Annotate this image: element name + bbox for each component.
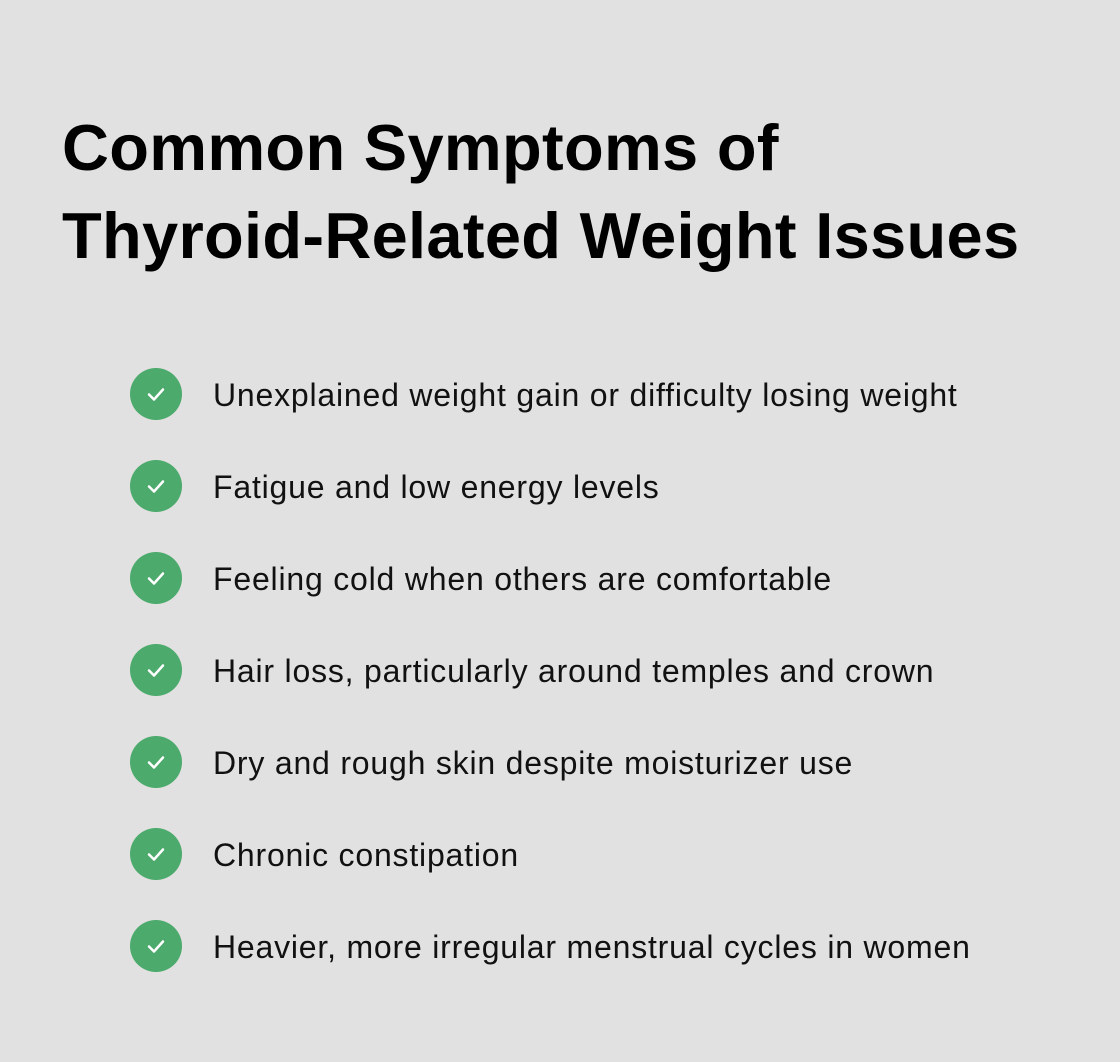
item 3: Feeling cold when others are comfortable <box>213 561 832 597</box>
item 2: Fatigue and low energy levels <box>213 469 660 505</box>
symptom list <box>130 368 971 972</box>
item 4: Hair loss, particularly around temples and crown <box>213 653 934 689</box>
title: Thyroid-Related Weight Issues <box>62 199 1019 272</box>
item 1 <box>130 368 958 420</box>
item 7 <box>130 920 971 972</box>
item 2 <box>130 460 660 512</box>
item 1: Unexplained weight gain or difficulty losing weight <box>213 377 958 413</box>
item 7: Heavier, more irregular menstrual cycles in women <box>213 929 971 965</box>
item 4 <box>130 644 934 696</box>
item 3 <box>130 552 832 604</box>
item 5: Dry and rough skin despite moisturizer use <box>213 745 853 781</box>
item 6: Chronic constipation <box>213 837 519 873</box>
item 6 <box>130 828 519 880</box>
item 5 <box>130 736 853 788</box>
title <box>62 111 1019 272</box>
title: Common Symptoms of <box>62 111 779 184</box>
